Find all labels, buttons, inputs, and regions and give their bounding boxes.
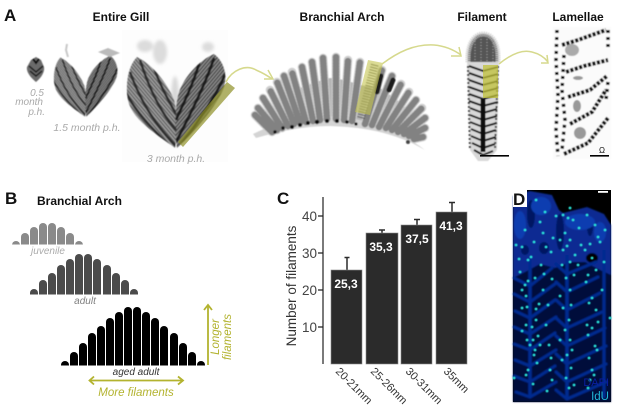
error bars — [344, 202, 455, 270]
arrow: gill to arch — [226, 68, 273, 82]
panel C: bar chart — [277, 189, 471, 407]
panel B: branchial arch schematic — [5, 189, 234, 399]
heading: Filament: Filament — [457, 10, 507, 24]
image: 1.5 month gill — [53, 44, 120, 119]
panel letter C: C — [277, 189, 289, 208]
label: 0.5 month p.h. — [15, 88, 45, 118]
bars — [331, 212, 467, 364]
heading: Branchial Arch: Branchial Arch — [300, 10, 384, 24]
bar values — [334, 219, 463, 291]
highlight: yellow band on gill — [178, 82, 235, 147]
y axis label: Number of filaments — [284, 225, 299, 346]
image: 3 month gill — [122, 30, 235, 162]
y tick labels: 40 — [302, 209, 317, 224]
x tick labels: 30-31mm — [403, 366, 444, 407]
arrow: longer filaments — [204, 305, 212, 365]
chart: adult profile — [30, 254, 138, 299]
label: 1.5 month p.h.: 1.5 month p.h. — [53, 122, 121, 134]
bar values: 41,3 — [439, 219, 463, 233]
label: more filaments: More filaments — [98, 387, 174, 399]
cyan IdU nuclei — [514, 200, 610, 391]
arrow: more filaments — [90, 376, 183, 384]
x tick labels — [333, 366, 471, 407]
bar values: 25,3 — [334, 277, 358, 291]
bar values: 37,5 — [405, 232, 429, 246]
panel D: IdU micrograph — [513, 190, 611, 403]
scale bar: filament — [480, 155, 509, 157]
scale bar: micrograph — [598, 191, 608, 193]
y tick labels: 30 — [302, 246, 317, 261]
image: branchial arch — [253, 57, 425, 150]
panel letter A: A — [4, 6, 16, 25]
highlight: yellow band on filament — [483, 65, 498, 98]
x tick labels: 20-21mm — [333, 366, 374, 407]
image: filament — [467, 33, 499, 161]
label: 0.5 month p.h.: 0.5 — [30, 88, 44, 99]
heading: Branchial Arch: Branchial Arch — [37, 194, 122, 208]
label: longer filaments — [210, 314, 234, 360]
arrow: filament to lamellae — [499, 51, 548, 64]
label: lamellae icon: Ω — [599, 146, 605, 155]
chart: juvenile profile — [12, 223, 83, 244]
letter D box — [513, 190, 527, 207]
image: 0.5 month gill — [27, 57, 44, 82]
heading: Entire Gill: Entire Gill — [93, 10, 149, 24]
micrograph background — [513, 190, 611, 402]
label: 3 month p.h.: 3 month p.h. — [147, 153, 205, 165]
label: aged adult: aged adult — [113, 367, 161, 378]
chart: aged adult profile — [61, 307, 205, 370]
panel letter D: D — [513, 190, 525, 209]
blue DAPI tissue — [513, 191, 611, 402]
highlight: yellow band on arch — [355, 60, 383, 115]
label: juvenile: juvenile — [29, 246, 65, 257]
label: longer filaments: Longer — [210, 318, 222, 355]
x tick labels: 25-26mm — [368, 366, 409, 407]
y tick labels: 10 — [302, 320, 317, 335]
x tick labels: 35mm — [441, 366, 471, 396]
arrow: arch to filament — [382, 45, 461, 64]
label: IdU: IdU — [591, 391, 609, 403]
y axis — [318, 197, 323, 364]
y tick labels: 20 — [302, 283, 317, 298]
panel A: gill anatomy — [4, 6, 611, 165]
panel letter B: B — [5, 189, 17, 208]
label: longer filaments: filaments — [222, 314, 234, 360]
heading: Lamellae: Lamellae — [552, 10, 604, 24]
image: lamellae — [553, 27, 611, 159]
y tick labels — [302, 209, 317, 335]
label: 0.5 month p.h.: p.h. — [27, 107, 45, 118]
scale bar: lamellae — [590, 155, 609, 157]
bar values: 35,3 — [369, 240, 393, 254]
label: DAPI: DAPI — [583, 377, 609, 389]
label: 0.5 month p.h.: month — [15, 97, 43, 108]
label: adult: adult — [74, 296, 97, 307]
